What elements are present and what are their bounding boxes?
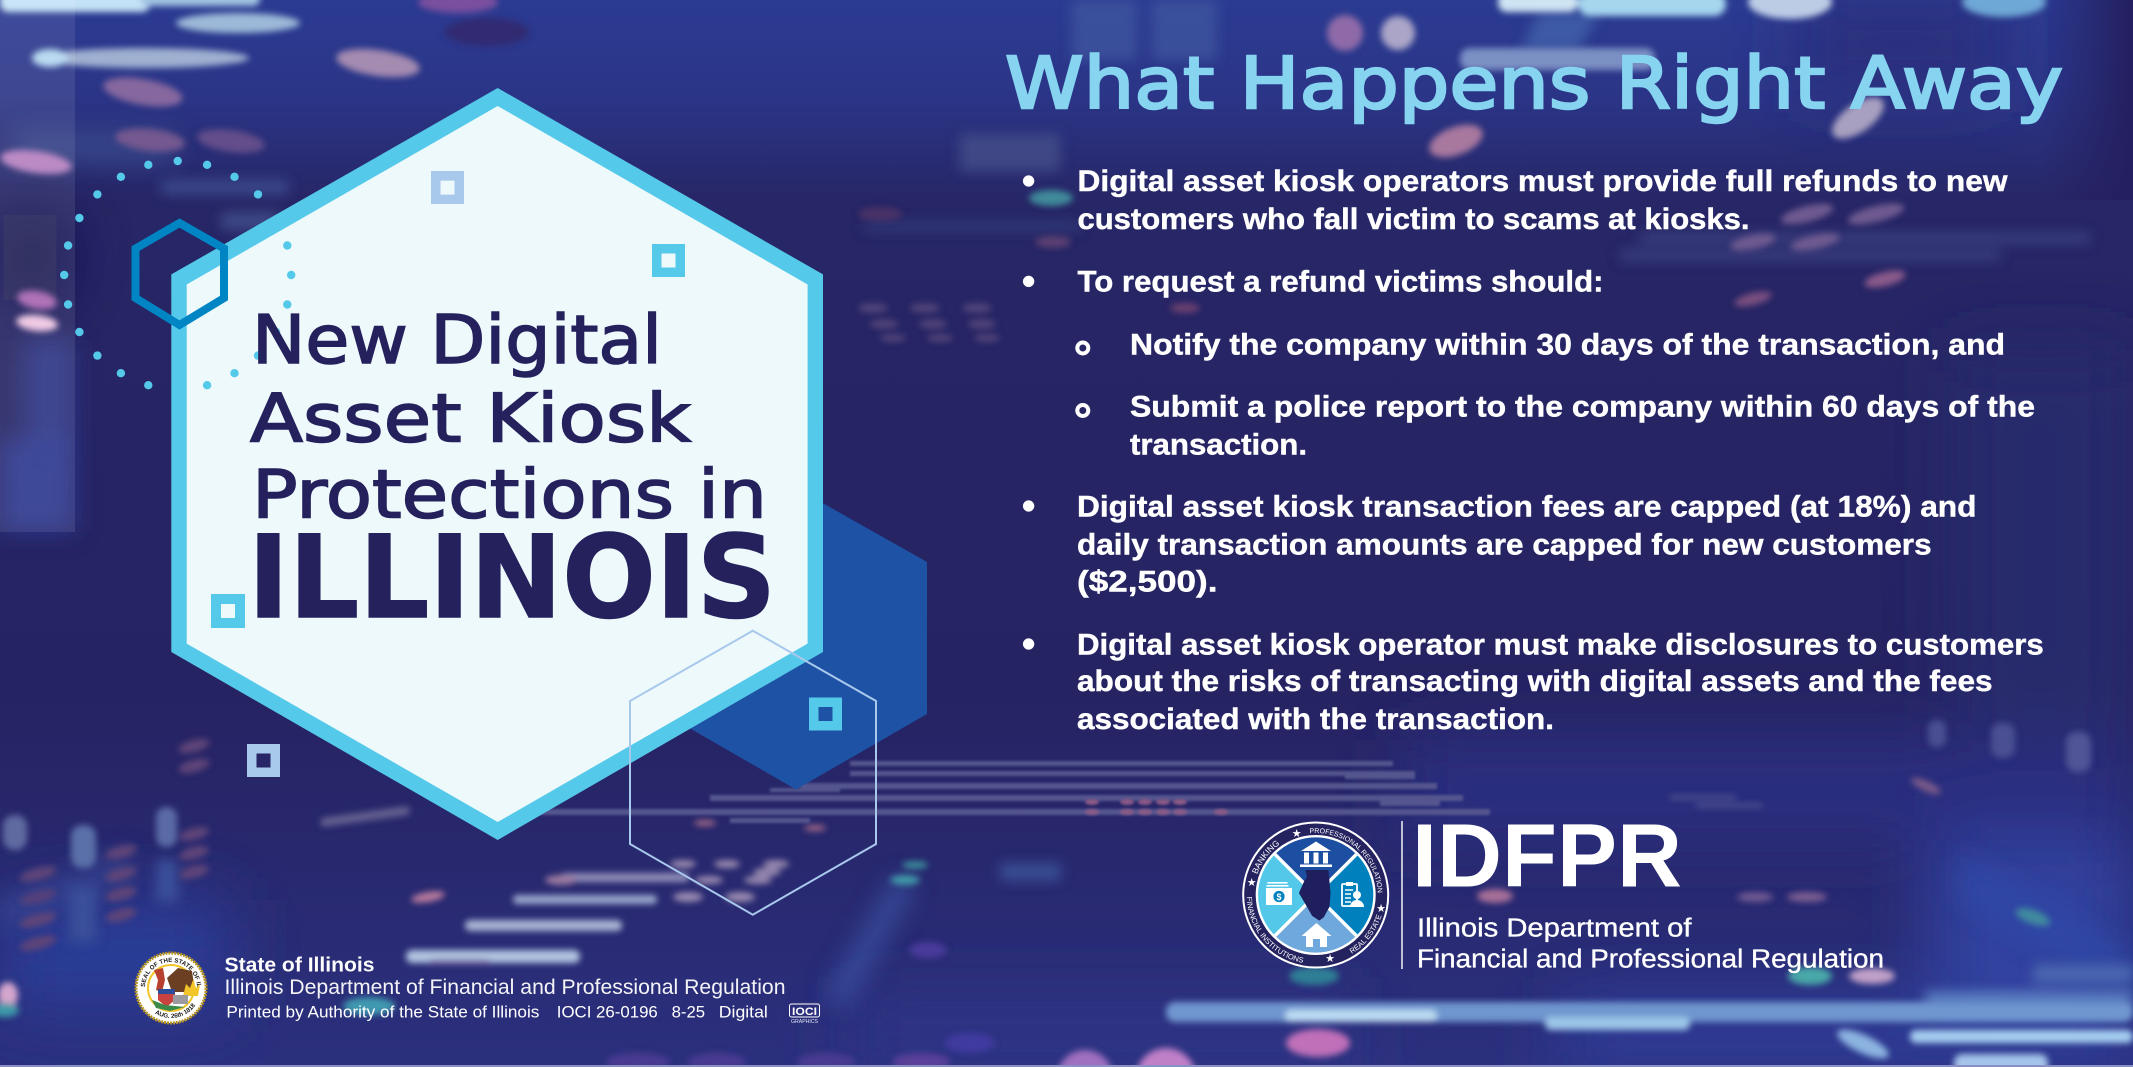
emblem stars: ★: [1325, 952, 1335, 965]
footer: state and printing credits: Illinois Department of Financial and Professional Regulation: [224, 975, 786, 999]
sub-bullet: submit a police report: transaction.: [1130, 428, 1307, 461]
emblem ring lettering: FINANCIAL INSTITUTIONS: [1246, 897, 1304, 962]
title: New Digital Asset Kiosk Protections in Illinois: Protections in: [252, 455, 767, 533]
horizontal server lines: [540, 761, 1490, 823]
title: New Digital Asset Kiosk Protections in Illinois: [248, 301, 776, 644]
bullet: refunds: Digital asset kiosk operators must provide full refunds to new: [1078, 165, 2008, 198]
emblem stars: ★: [1292, 827, 1302, 840]
top-left lights: [0, 0, 150, 12]
icon: clipboard and person: [1342, 882, 1364, 907]
icon: IOCI Graphics mark: IOCI: [792, 1006, 817, 1018]
bullet: fee and amount caps: ($2,500).: [1077, 566, 1218, 599]
footer: state and printing credits: [224, 955, 786, 1022]
lower-left vertical bars and pink dots: [3, 815, 27, 850]
footer: state and printing credits: 8-25: [672, 1004, 705, 1022]
footer: state and printing credits: Printed by Authority of the State of Illinois: [226, 1004, 539, 1022]
IDFPR logo emblem: [1242, 822, 1390, 968]
State of Illinois seal: SEAL OF THE STATE OF ILLINOIS: [140, 958, 202, 987]
hexagon: small outline, upper left: [136, 223, 224, 325]
icon: bank building: [1300, 842, 1332, 867]
IDFPR wordmark: IDFPR: [1412, 807, 1682, 907]
lower-right lights: [1166, 1002, 2133, 1022]
icon: Illinois state silhouette: [1300, 870, 1330, 920]
icon: house: [1302, 923, 1332, 947]
emblem stars: [1247, 827, 1386, 965]
emblem ring lettering: PROFESSIONAL REGULATION: [1310, 828, 1382, 892]
icon: stack of money: [1266, 882, 1292, 905]
State of Illinois seal: AUG. 26th 1818: [155, 1003, 195, 1018]
emblem ring lettering: BANKING: [1252, 840, 1279, 874]
bullet: disclosures: Digital asset kiosk operator must make disclosures to customers: [1077, 628, 2044, 661]
bullet: fee and amount caps: Digital asset kiosk transaction fees are capped (at 18%) and: [1077, 491, 1976, 524]
bullet: refunds: [1023, 165, 2008, 236]
sub-bullet: submit a police report: Submit a police report to the company within 60 days of the: [1130, 391, 2035, 424]
bullet: fee and amount caps: [1023, 491, 1976, 599]
IDFPR full department name: Illinois Department of: [1417, 915, 1693, 943]
bullet: disclosures: about the risks of transacting with digital assets and the fees: [1077, 665, 1993, 698]
icon: stack of money: $: [1276, 892, 1282, 902]
footer: state and printing credits: IOCI 26-0196: [557, 1004, 658, 1022]
dotted ring: [60, 157, 295, 389]
heading: What Happens Right Away: What Happens Right Away: [1005, 42, 2063, 125]
hexagon: dark blue backing shape: [665, 488, 927, 790]
footer: state and printing credits: State of Illinois: [224, 955, 374, 977]
footer: state and printing credits: Digital: [719, 1004, 768, 1022]
title: New Digital Asset Kiosk Protections in Illinois: New Digital: [252, 301, 662, 379]
icon: IOCI Graphics mark: [790, 1004, 820, 1025]
hexagon: main title panel: [171, 88, 823, 840]
mid dot grid beside hexagon: [858, 303, 888, 313]
emblem stars: ★: [1247, 876, 1257, 889]
divider: [1401, 821, 1403, 969]
bullet: fee and amount caps: daily transaction amounts are capped for new customers: [1077, 528, 1932, 561]
IDFPR full department name: Financial and Professional Regulation: [1417, 946, 1884, 974]
sub-bullet: notify the company: Notify the company within 30 days of the transaction, and: [1130, 328, 2005, 361]
title: New Digital Asset Kiosk Protections in Illinois: Asset Kiosk: [250, 380, 691, 458]
State of Illinois seal: [134, 952, 208, 1024]
emblem stars: ★: [1376, 902, 1386, 915]
bullet: refunds: customers who fall victim to scams at kiosks.: [1078, 203, 1750, 236]
IDFPR full department name: [1417, 915, 1884, 974]
bullet: disclosures: associated with the transaction.: [1077, 703, 1554, 736]
icon: IOCI Graphics mark: GRAPHICS: [791, 1019, 818, 1025]
bullet: disclosures: [1023, 628, 2044, 736]
sub-bullet: submit a police report: [1077, 391, 2035, 461]
emblem ring lettering: REAL ESTATE: [1349, 914, 1382, 954]
bullet: requesting a refund: To request a refund victims should:: [1078, 266, 1604, 299]
hexagon: thin outline, lower right: [630, 631, 876, 915]
decorative squares: [211, 171, 842, 777]
top-centre and top-right lights: [1327, 15, 1363, 51]
title: New Digital Asset Kiosk Protections in Illinois: ILLINOIS: [248, 511, 776, 644]
bullet list: what happens right away: [1023, 165, 2044, 736]
centre-bottom lights: [561, 873, 689, 882]
emblem ring lettering: [1246, 828, 1382, 962]
